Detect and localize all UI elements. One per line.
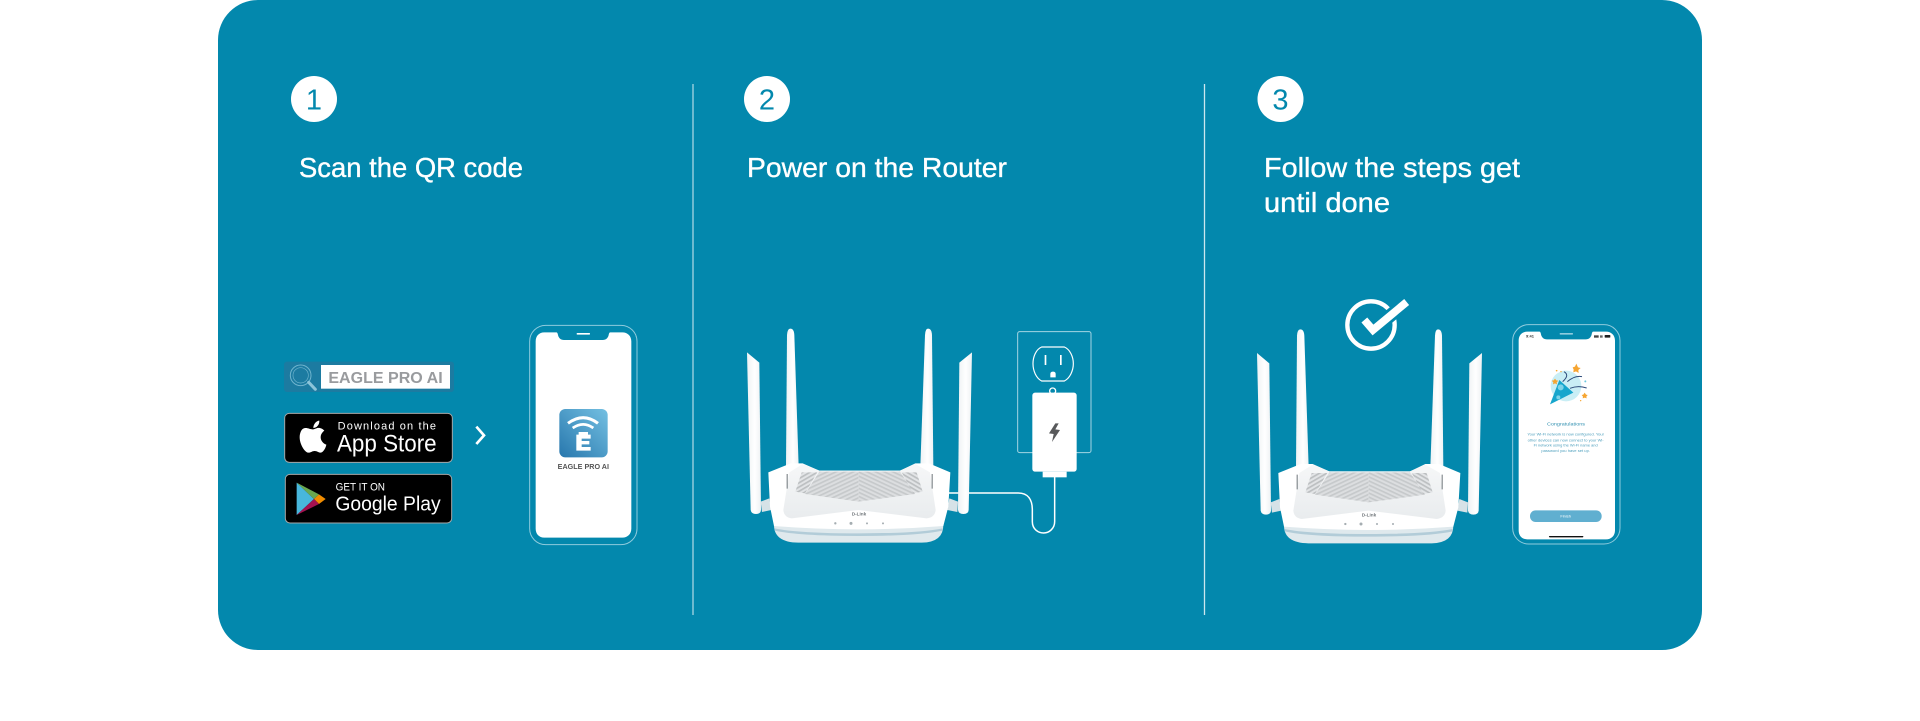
confirmation message: Fi network using the Wi-Fi name and <box>1534 443 1598 447</box>
phone with congratulations screen <box>1513 325 1620 544</box>
power adapter with lightning bolt <box>1032 388 1077 477</box>
step 3 heading: until done <box>1264 187 1390 218</box>
step 1 number badge: 1 <box>306 84 322 116</box>
step 2 number badge: 2 <box>759 84 775 116</box>
App Store badge <box>285 413 452 462</box>
finish button <box>1530 510 1602 522</box>
step 1 graphics <box>284 325 637 545</box>
panel background <box>218 0 1702 650</box>
confirmation message <box>1527 432 1605 453</box>
step 3 heading: Follow the steps get <box>1264 152 1520 183</box>
confirmation message: password you have set up. <box>1541 449 1590 453</box>
phone with app icon: EAGLE PRO AI <box>558 462 609 471</box>
step 2 number badge <box>744 76 790 122</box>
icon: check mark in circle <box>1347 301 1407 349</box>
phone with app icon <box>530 325 637 545</box>
router <box>1257 329 1482 543</box>
step 3 heading <box>1264 152 1520 218</box>
step 2 heading: Power on the Router <box>747 152 1007 183</box>
power cable <box>948 477 1055 533</box>
router <box>747 329 972 543</box>
divider between step 1 and step 2 <box>692 84 694 615</box>
wall outlet <box>1018 332 1091 453</box>
icon: Eagle Pro AI app <box>559 409 608 457</box>
divider between step 2 and step 3 <box>1204 84 1206 615</box>
status bar: 9:41 <box>1526 334 1535 339</box>
router: D-Link <box>1362 512 1377 517</box>
icon: party popper <box>1550 364 1588 404</box>
router: D-Link <box>852 512 867 517</box>
step 3 number badge: 3 <box>1272 84 1289 116</box>
App Store badge: Download on the <box>338 420 436 432</box>
arrow: chevron to phone <box>476 427 484 444</box>
Google Play badge <box>285 474 452 523</box>
Google Play badge: GET IT ON <box>336 482 385 494</box>
step 3 number badge <box>1258 76 1304 122</box>
confirmation message: other devices can now connect to your Wi- <box>1528 438 1604 442</box>
step 1 number badge <box>291 76 337 122</box>
confirmation message: Your Wi-Fi network is now configured. Your <box>1527 432 1605 436</box>
step 3 graphics <box>1257 301 1620 544</box>
phone with congratulations screen: Congratulations <box>1547 422 1586 427</box>
search bar: EAGLE PRO AI <box>284 362 454 392</box>
Google Play badge: Google Play <box>335 493 441 516</box>
status bar <box>1526 334 1610 339</box>
step 2 graphics <box>747 329 1091 543</box>
finish button: Finish <box>1560 514 1571 519</box>
App Store badge: App Store <box>337 431 437 458</box>
search bar: EAGLE PRO AI: EAGLE PRO AI <box>328 370 443 387</box>
step 1 heading: Scan the QR code <box>299 152 523 183</box>
